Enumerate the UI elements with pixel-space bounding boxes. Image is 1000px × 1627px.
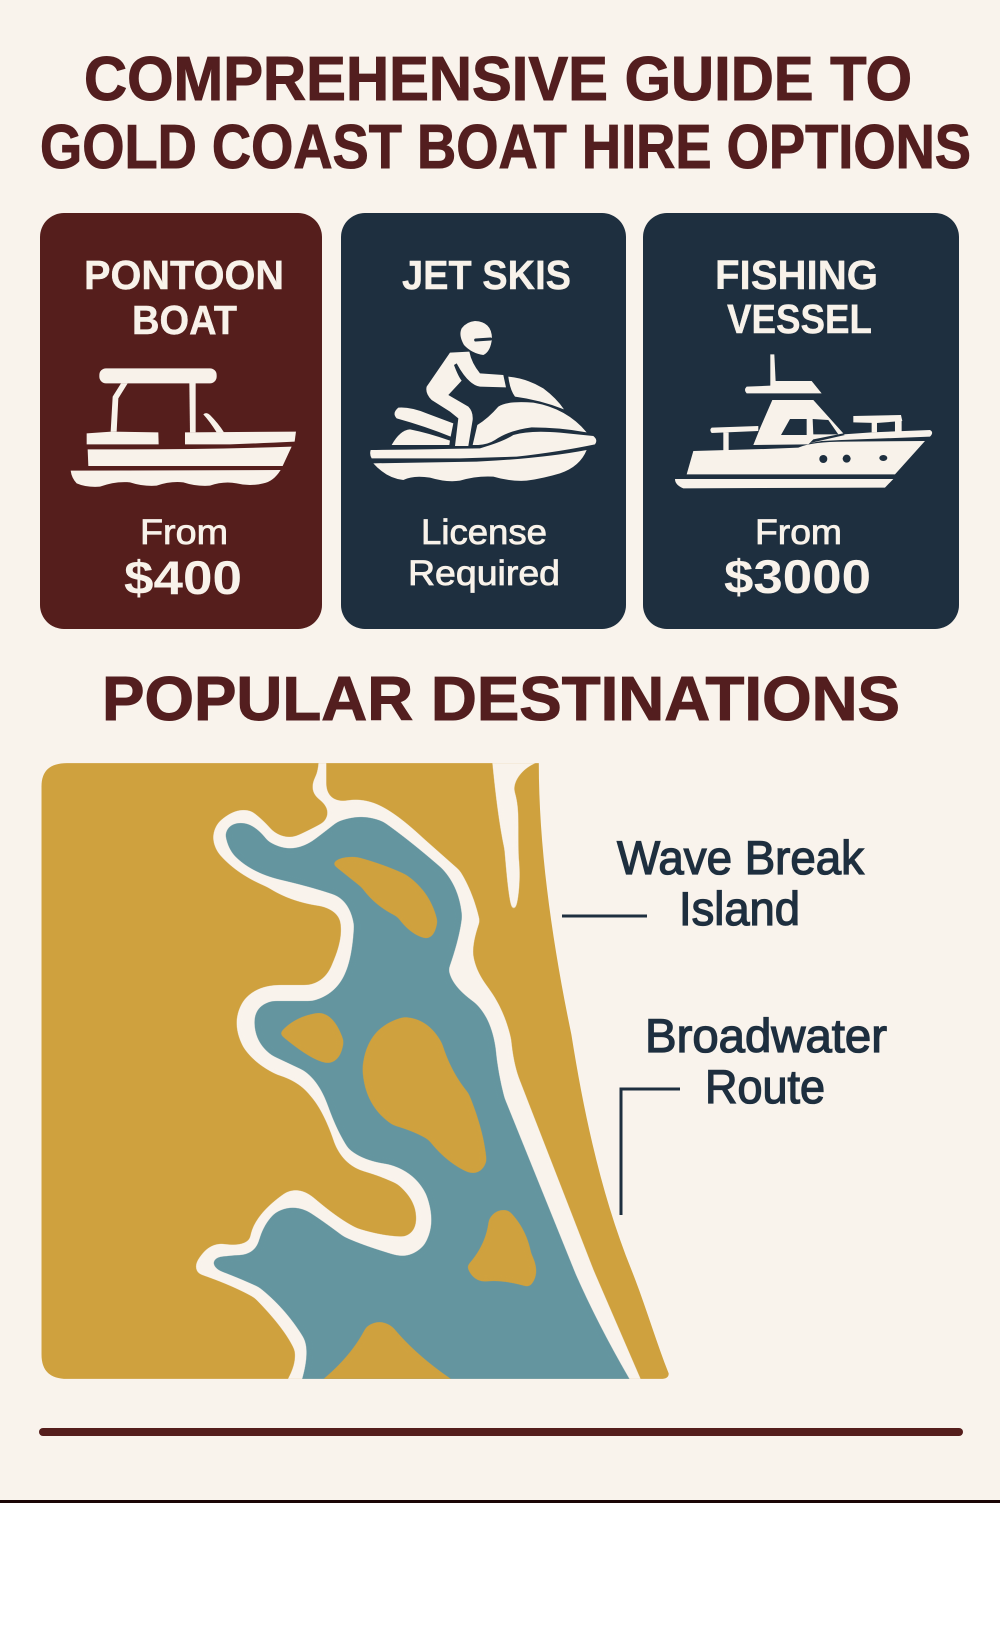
- panel: jet skis: [341, 213, 626, 629]
- icon: fishing boat: [675, 354, 932, 488]
- callout: wave break island: [562, 831, 864, 935]
- panel: fishing vessel: $3000: [724, 550, 871, 603]
- title: COMPREHENSIVE GUIDE TO: [84, 45, 912, 114]
- panel: fishing vessel: FISHING: [715, 252, 878, 298]
- panel: fishing vessel: From: [755, 513, 842, 552]
- panel: jet skis: Required: [408, 554, 560, 593]
- callout: broadwater route: [621, 1009, 887, 1215]
- title: [40, 45, 971, 182]
- panel: jet skis: JET SKIS: [402, 252, 571, 298]
- panel: pontoon boat: [40, 213, 322, 629]
- callout: wave break island: Island: [679, 882, 800, 935]
- icon: pontoon boat: [71, 368, 296, 487]
- panel: pontoon boat: From: [140, 513, 228, 552]
- panel: pontoon boat: $400: [124, 551, 242, 604]
- panel: pontoon boat: PONTOON: [84, 252, 284, 298]
- callout: wave break island: Wave Break: [617, 831, 864, 884]
- panel: fishing vessel: [643, 213, 959, 629]
- heading: popular destinations: POPULAR DESTINATIONS: [102, 665, 900, 734]
- panel: fishing vessel: VESSEL: [727, 296, 872, 342]
- callout: broadwater route: Broadwater: [645, 1009, 887, 1062]
- panel: jet skis: License: [421, 513, 547, 552]
- map: Gold Coast broadwater: [42, 748, 669, 1401]
- panel: pontoon boat: BOAT: [132, 297, 237, 343]
- icon: jet ski rider: [370, 321, 596, 481]
- callout: broadwater route: Route: [705, 1060, 825, 1113]
